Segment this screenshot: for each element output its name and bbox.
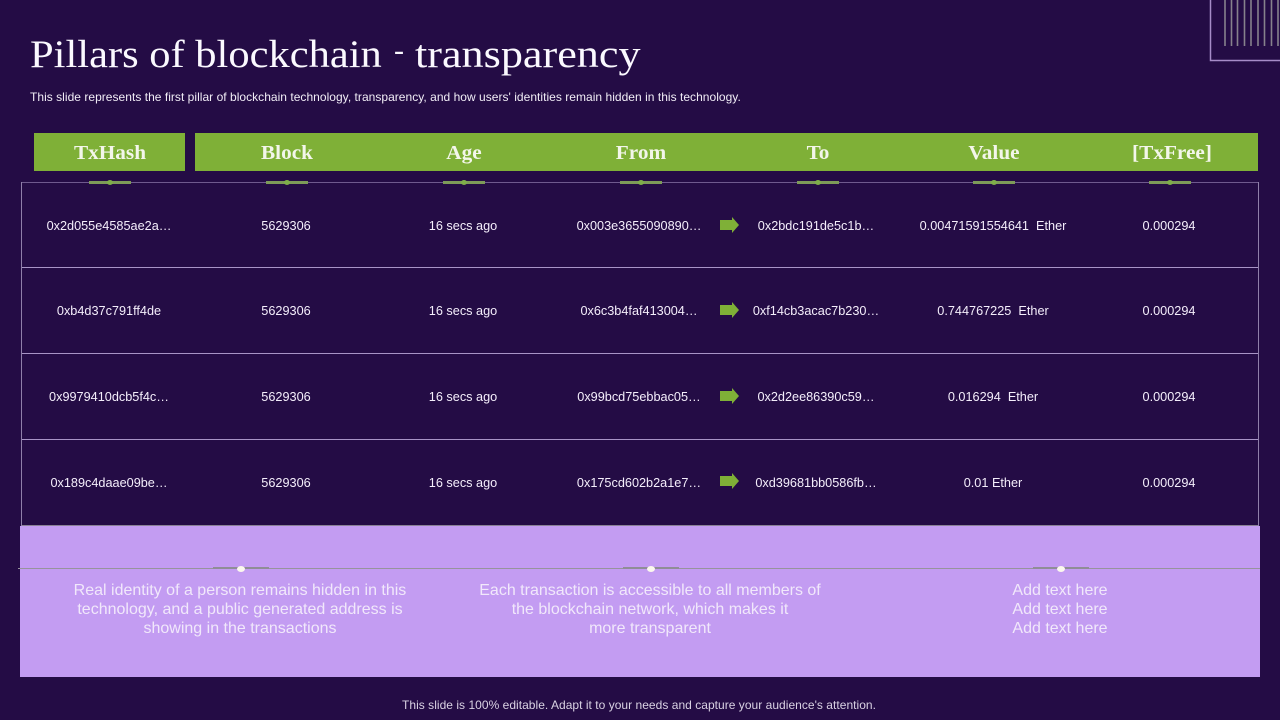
note text: placeholder: Add text here [1012, 582, 1108, 598]
table row 4: 16 secs ago [429, 476, 497, 490]
note text: accessibility: the blockchain network, which makes it [512, 600, 788, 618]
subtitle: This slide represents the first pillar of blockchain technology, transparency, and how users' identities remain hidden in this technology. [30, 90, 741, 104]
header labels [74, 142, 1212, 164]
table row 3: 0x9979410dcb5f4c… [49, 390, 169, 404]
table row 4: 0x175cd602b2a1e7… [577, 476, 701, 490]
header labels: Block [261, 142, 313, 164]
table row 2 [57, 304, 1196, 318]
table row 2: 0x6c3b4faf413004… [580, 304, 698, 318]
table row 3: 0x2d2ee86390c59… [757, 390, 875, 404]
table row 1: 0x2bdc191de5c1b… [758, 219, 874, 233]
note text: placeholder: Add text here [1012, 620, 1108, 636]
header labels: From [616, 142, 666, 164]
header labels: To [807, 142, 829, 164]
note text: placeholder: Add text here [1012, 600, 1108, 618]
note text: accessibility: Each transaction is accessible to all members of [479, 582, 821, 598]
header labels: Age [446, 142, 482, 164]
note text: identity: showing in the transactions [144, 620, 336, 636]
table row 1 [47, 219, 1196, 233]
table row 1: 0x003e3655090890… [577, 219, 701, 233]
table row 1: 0x2d055e4585ae2a… [47, 219, 171, 233]
title: - [394, 34, 404, 67]
table grid [21, 182, 1259, 526]
table row 4: 0.01 Ether [964, 476, 1022, 490]
decorative corner frame [1210, 0, 1280, 62]
note text: accessibility: more transparent [589, 620, 711, 636]
note text: accessibility [479, 582, 821, 636]
table row 4: 0.000294 [1143, 476, 1195, 490]
table row 3: 0x99bcd75ebbac05… [577, 390, 701, 404]
icon: arrow row 2 [720, 302, 739, 318]
table row 3: 5629306 [261, 390, 311, 404]
panel: table header [34, 133, 1258, 171]
table row 4: 5629306 [261, 476, 311, 490]
note text: identity [74, 582, 406, 636]
note markers [213, 566, 1089, 572]
table row 1: 0.000294 [1143, 219, 1195, 233]
table row 2: 5629306 [261, 304, 311, 318]
table row 3: 0.016294 Ether [948, 390, 1038, 404]
note text: identity: Real identity of a person remains hidden in this [74, 582, 406, 598]
table row 1: 16 secs ago [429, 219, 497, 233]
title: transparency [415, 33, 641, 76]
title [30, 33, 641, 76]
table row 2: 0xb4d37c791ff4de [57, 304, 161, 318]
note text: placeholder [1012, 582, 1108, 636]
note text: identity: technology, and a public generated address is [77, 600, 403, 618]
header labels: TxHash [74, 142, 146, 164]
header labels: [TxFree] [1132, 142, 1212, 164]
icon: arrow row 3 [720, 388, 739, 404]
column markers [89, 180, 1191, 185]
table row 3: 0.000294 [1143, 390, 1195, 404]
header labels: Value [968, 142, 1020, 164]
table row 4: 0xd39681bb0586fb… [755, 476, 877, 490]
table row 3: 16 secs ago [429, 390, 497, 404]
table row 3 [49, 390, 1196, 404]
table row 2: 0.000294 [1143, 304, 1195, 318]
table row 2: 0xf14cb3acac7b230… [753, 304, 879, 318]
header band [195, 133, 1258, 171]
icon: arrow row 1 [720, 217, 739, 233]
table row 1: 5629306 [261, 219, 311, 233]
icon: arrow row 4 [720, 473, 739, 489]
title: Pillars of blockchain [30, 33, 382, 76]
footer note: This slide is 100% editable. Adapt it to your needs and capture your audience's attention. [402, 698, 876, 712]
table row 2: 16 secs ago [429, 304, 497, 318]
panel: notes [20, 526, 1260, 677]
table row 1: 0.00471591554641 Ether [920, 219, 1066, 233]
header cell: TxHash [34, 133, 185, 171]
table row 4: 0x189c4daae09be… [50, 476, 168, 490]
table row 2: 0.744767225 Ether [937, 304, 1049, 318]
table row 4 [50, 476, 1196, 490]
